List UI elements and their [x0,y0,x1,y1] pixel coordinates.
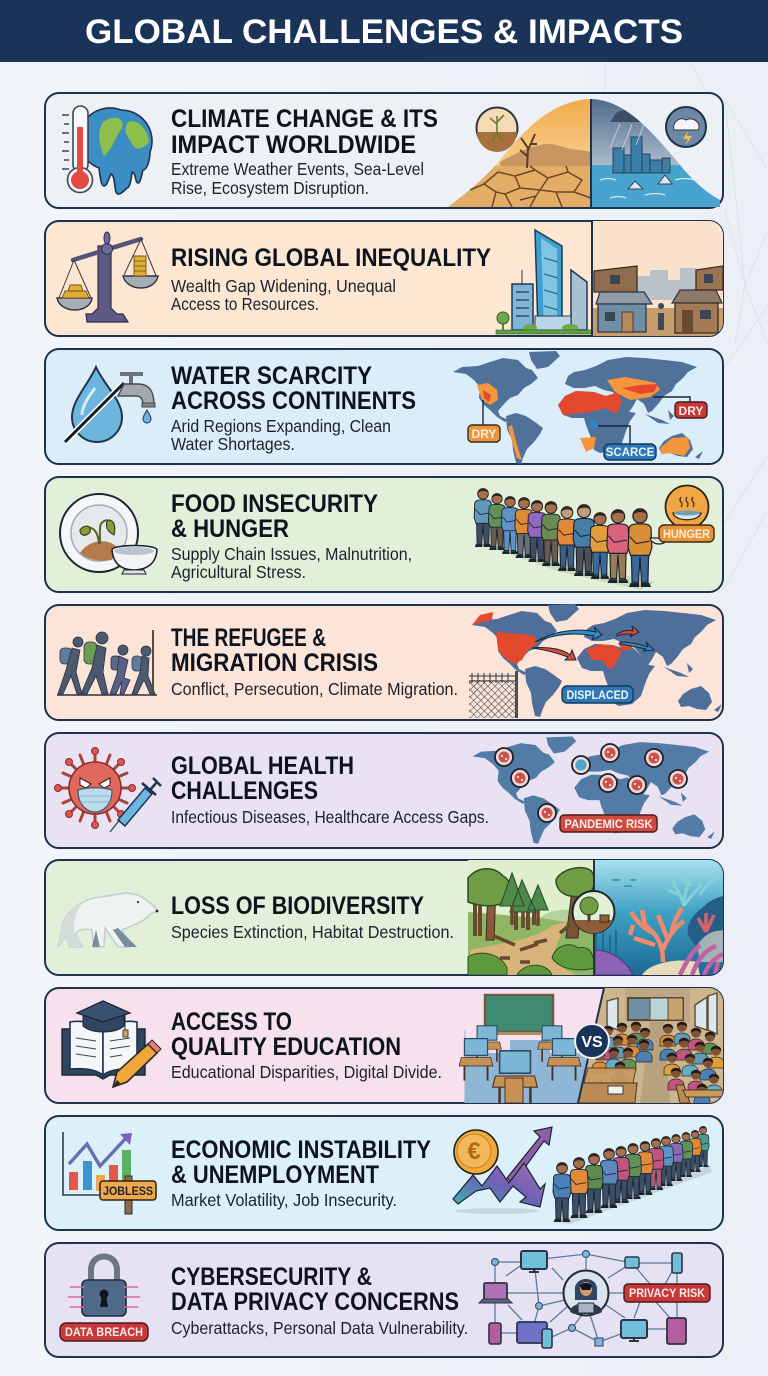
panel: inequality [45,221,723,336]
panel: global health [45,733,723,848]
description: Access to Resources. [171,294,319,314]
title: & UNEMPLOYMENT [171,1161,379,1189]
map: dry regions [453,351,707,464]
description: Supply Chain Issues, Malnutrition, [171,544,412,564]
map: pathogens [472,736,715,844]
title [171,752,354,805]
title: WATER SCARCITY [171,362,372,390]
panel: biodiversity [45,860,723,975]
illustration: drought vs flood [448,99,723,208]
icon: padlock and data breach [60,1256,148,1341]
badge: vs [575,1024,609,1058]
description: Agricultural Stress. [171,562,306,582]
map: displacement [469,604,722,718]
description: Rise, Ecosystem Disruption. [171,178,369,198]
title: FOOD INSECURITY [171,490,378,518]
title: LOSS OF BIODIVERSITY [171,892,424,920]
icon: plate with sprout and bowl [60,494,157,574]
arrow: blue east [620,642,654,651]
illustration: euro coin and arrows: € [467,1138,481,1165]
description: Conflict, Persecution, Climate Migration. [171,679,458,699]
icon: polar bear [58,893,158,947]
description: Educational Disparities, Digital Divide. [171,1062,442,1082]
fence [469,671,518,718]
title: ACCESS TO [171,1008,292,1036]
title [171,1008,401,1061]
description [171,544,412,582]
description [171,416,391,454]
panel: cybersecurity [45,1243,723,1357]
illustration: euro coin and arrows [453,1127,552,1214]
title bar [0,0,768,62]
title: ECONOMIC INSTABILITY [171,1136,431,1164]
label: displaced: DISPLACED [566,688,629,702]
description: Wealth Gap Widening, Unequal [171,276,396,296]
description: Market Volatility, Job Insecurity. [171,1190,397,1210]
arrow: red north [617,626,639,637]
title: MIGRATION CRISIS [171,649,378,677]
label: dry [468,425,500,442]
description [171,159,424,198]
illustration: unemployment queue [553,1126,712,1224]
panel: refugee crisis [45,604,723,720]
title: ACROSS CONTINENTS [171,387,416,415]
description [171,276,396,314]
title: QUALITY EDUCATION [171,1033,401,1061]
description: Species Extinction, Habitat Destruction. [171,922,454,942]
label: dry red [675,402,707,418]
title: RISING GLOBAL INEQUALITY [171,244,491,272]
label: hunger: HUNGER [663,527,710,541]
title [171,1136,431,1189]
label: dry: DRY [472,427,496,441]
title [171,362,416,415]
title [171,1263,459,1316]
label: pandemic risk: PANDEMIC RISK [564,817,653,831]
panel: climate change [45,93,723,208]
label: data breach: DATA BREACH [65,1325,143,1339]
description: Water Shortages. [171,434,295,454]
illustration: forest and reef [468,860,723,975]
title: CHALLENGES [171,777,318,805]
label: scarce: SCARCE [606,447,655,459]
badge: vs: VS [581,1034,603,1051]
icon: chart and jobless sign [63,1132,156,1214]
arrow: red to Africa [532,647,576,660]
title: GLOBAL HEALTH [171,752,354,780]
description: Arid Regions Expanding, Clean [171,416,391,436]
illustration: classroom comparison [458,988,723,1103]
title [171,624,378,677]
title: THE REFUGEE & [171,624,326,652]
description: Cyberattacks, Personal Data Vulnerability. [171,1318,468,1338]
arrow: blue to Europe [535,627,602,642]
title: IMPACT WORLDWIDE [171,131,416,159]
illustration: hacker network [479,1250,710,1348]
icon: melting globe and thermometer [62,106,152,194]
icon: unbalanced scales [57,232,158,322]
icon: hunger bowl [659,486,714,542]
icon: virus with mask and syringe [54,748,161,832]
icon: walking refugees [57,630,157,695]
description: Extreme Weather Events, Sea-Level [171,159,424,179]
icon: book, cap and pencil [62,1001,161,1087]
icon: crossed water drop and tap [65,367,155,442]
title [171,490,378,543]
panel: food insecurity [45,477,723,592]
panel: education [44,987,724,1104]
illustration: skyscrapers and slum [496,221,723,336]
illustration: food queue [472,488,668,590]
title: DATA PRIVACY CONCERNS [171,1288,459,1316]
title [171,105,438,159]
title: CLIMATE CHANGE & ITS [171,105,438,133]
title bar: GLOBAL CHALLENGES & IMPACTS [85,13,683,51]
label: privacy risk: PRIVACY RISK [629,1286,705,1300]
label: dry red: DRY [679,404,703,418]
title: & HUNGER [171,515,289,543]
panel: water scarcity [45,349,723,464]
label: jobless: JOBLESS [103,1184,153,1198]
panel: economic instability [45,1116,723,1230]
description: Infectious Diseases, Healthcare Access Gaps. [171,807,489,827]
title: CYBERSECURITY & [171,1263,372,1291]
